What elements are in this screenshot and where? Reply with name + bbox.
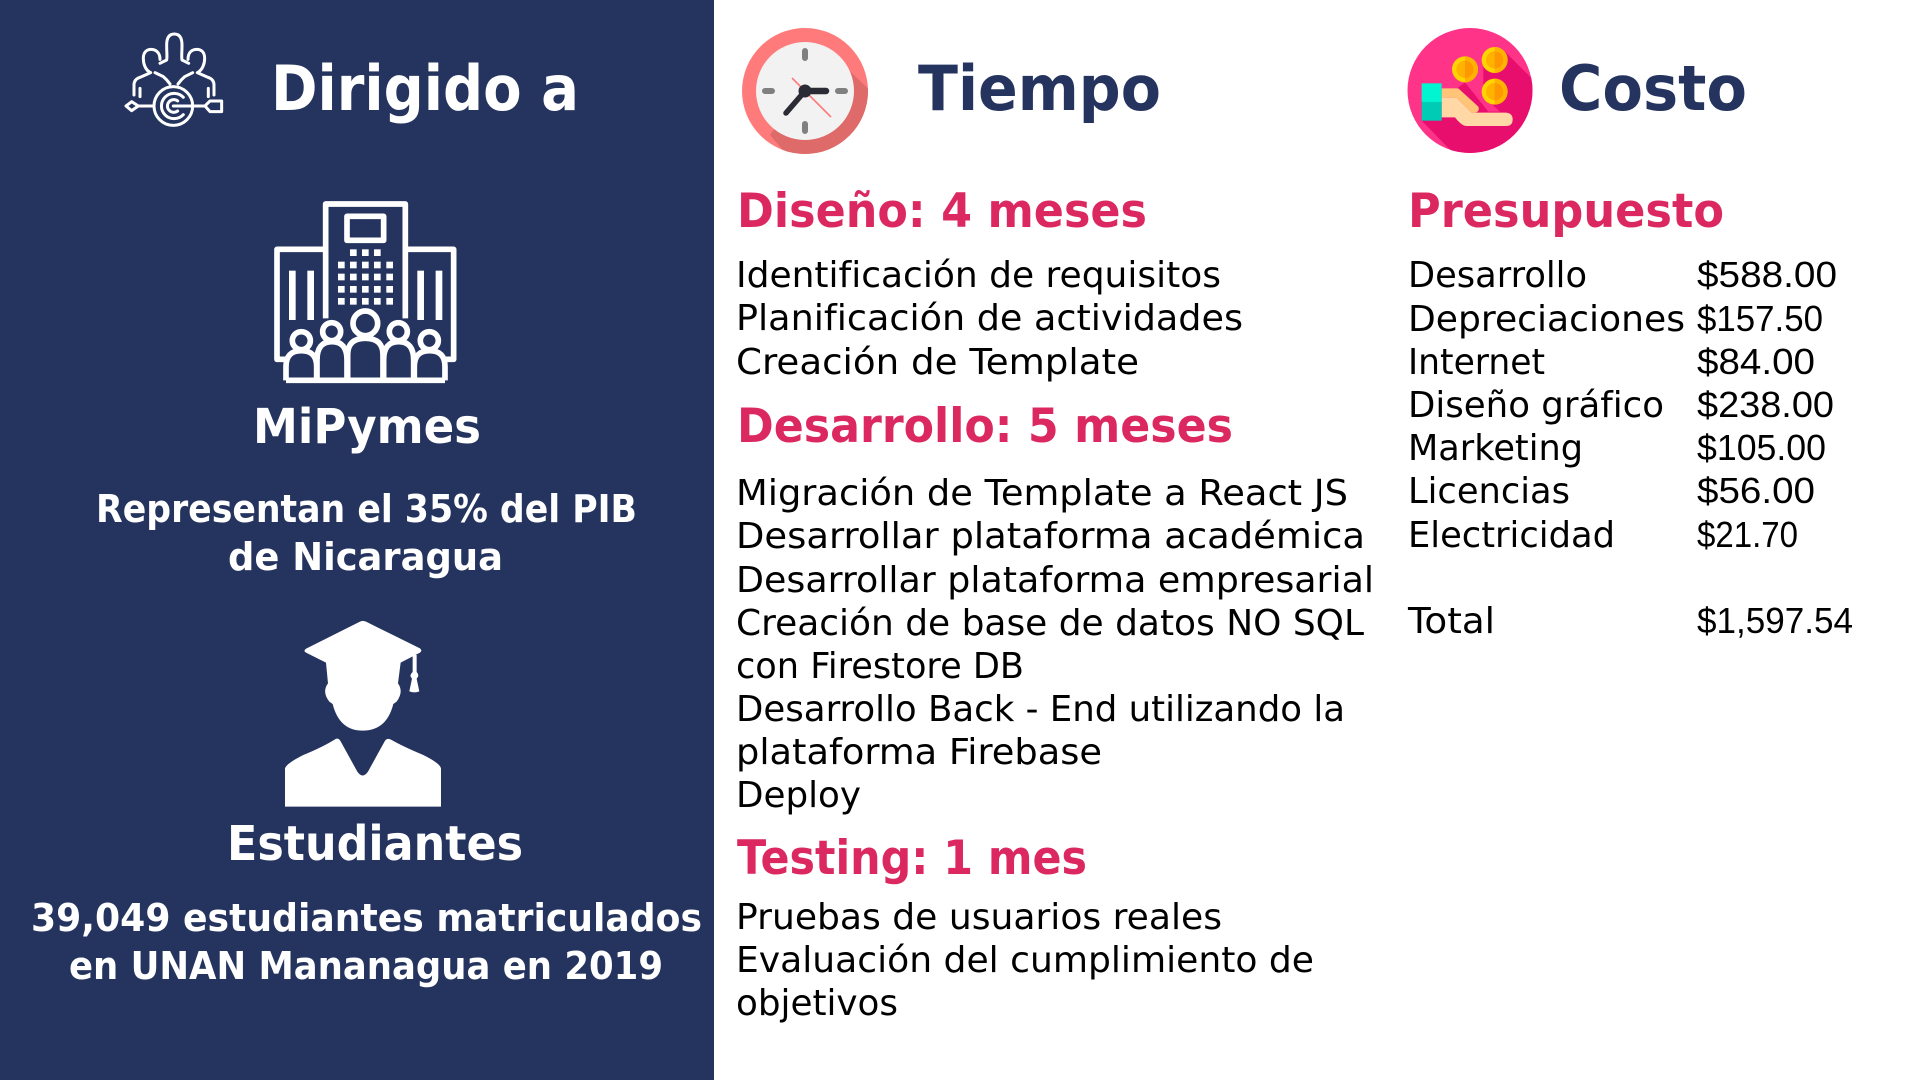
subheading: presupuesto: Presupuesto [1408, 184, 1724, 239]
table: budget: Licencias [1408, 471, 1570, 512]
text: mipymes description [96, 487, 637, 579]
heading: costo: Costo [1559, 52, 1747, 125]
heading: dirigido a: Dirigido a [271, 52, 579, 125]
icon: hand with coins [1408, 28, 1537, 160]
table: budget: $105.00 [1697, 427, 1826, 468]
table: budget: $238.00 [1697, 384, 1834, 425]
panel: dirigido a [0, 0, 714, 1080]
list: testing tasks [736, 897, 1314, 1024]
text: estudiantes description: en UNAN Mananagua en 2019 [69, 944, 663, 988]
table: budget: $84.00 [1697, 341, 1815, 382]
table: budget: Total [1407, 601, 1495, 642]
panel: tiempo [736, 28, 1374, 1024]
icon: building with people [277, 204, 454, 380]
table: budget: $56.00 [1697, 470, 1815, 511]
text: estudiantes description [31, 896, 702, 988]
list: diseño tasks: Identificación de requisitos [736, 255, 1221, 296]
list: diseño tasks: Planificación de actividades [736, 298, 1243, 339]
table: budget: $1,597.54 [1697, 600, 1853, 641]
list: testing tasks: Pruebas de usuarios reales [736, 897, 1222, 938]
list: diseño tasks [736, 255, 1243, 383]
list: diseño tasks: Creación de Template [736, 342, 1139, 383]
list: desarrollo tasks [736, 473, 1374, 816]
list: testing tasks: objetivos [736, 983, 898, 1024]
subheading: diseño: Diseño: 4 meses [737, 184, 1147, 239]
table: budget: Internet [1408, 342, 1545, 383]
list: desarrollo tasks: Creación de base de datos NO SQL [736, 603, 1364, 644]
table: budget [1407, 254, 1853, 642]
panel: costo [1407, 28, 1853, 642]
table: budget: Electricidad [1408, 515, 1615, 556]
table: budget: Marketing [1408, 428, 1583, 469]
list: testing tasks: Evaluación del cumplimiento de [736, 940, 1314, 981]
label: mipymes: MiPymes [253, 399, 481, 455]
icon: people with target [126, 34, 222, 125]
table: budget: $157.50 [1697, 298, 1823, 339]
text: estudiantes description: 39,049 estudiantes matriculados [31, 896, 702, 940]
text: mipymes description: Representan el 35% del PIB [96, 487, 637, 531]
list: desarrollo tasks: plataforma Firebase [736, 732, 1102, 773]
list: desarrollo tasks: Desarrollar plataforma académica [736, 516, 1365, 557]
list: desarrollo tasks: Desarrollo Back - End utilizando la [736, 689, 1345, 730]
table: budget: Depreciaciones [1408, 299, 1685, 340]
table: budget: $588.00 [1697, 254, 1837, 295]
list: desarrollo tasks: Migración de Template a React JS [736, 473, 1348, 514]
table: budget: Desarrollo [1408, 255, 1587, 296]
label: estudiantes: Estudiantes [227, 816, 523, 872]
text: mipymes description: de Nicaragua [228, 535, 503, 579]
table: budget: $21.70 [1697, 514, 1798, 555]
list: desarrollo tasks: Deploy [736, 775, 861, 816]
subheading: desarrollo: Desarrollo: 5 meses [737, 399, 1233, 454]
list: desarrollo tasks: con Firestore DB [736, 646, 1024, 687]
table: budget: Diseño gráfico [1408, 385, 1664, 426]
icon: graduate [285, 621, 441, 807]
subheading: testing: Testing: 1 mes [737, 831, 1087, 886]
heading: tiempo: Tiempo [918, 52, 1161, 125]
list: desarrollo tasks: Desarrollar plataforma empresarial [736, 560, 1374, 601]
icon: clock [742, 28, 868, 154]
